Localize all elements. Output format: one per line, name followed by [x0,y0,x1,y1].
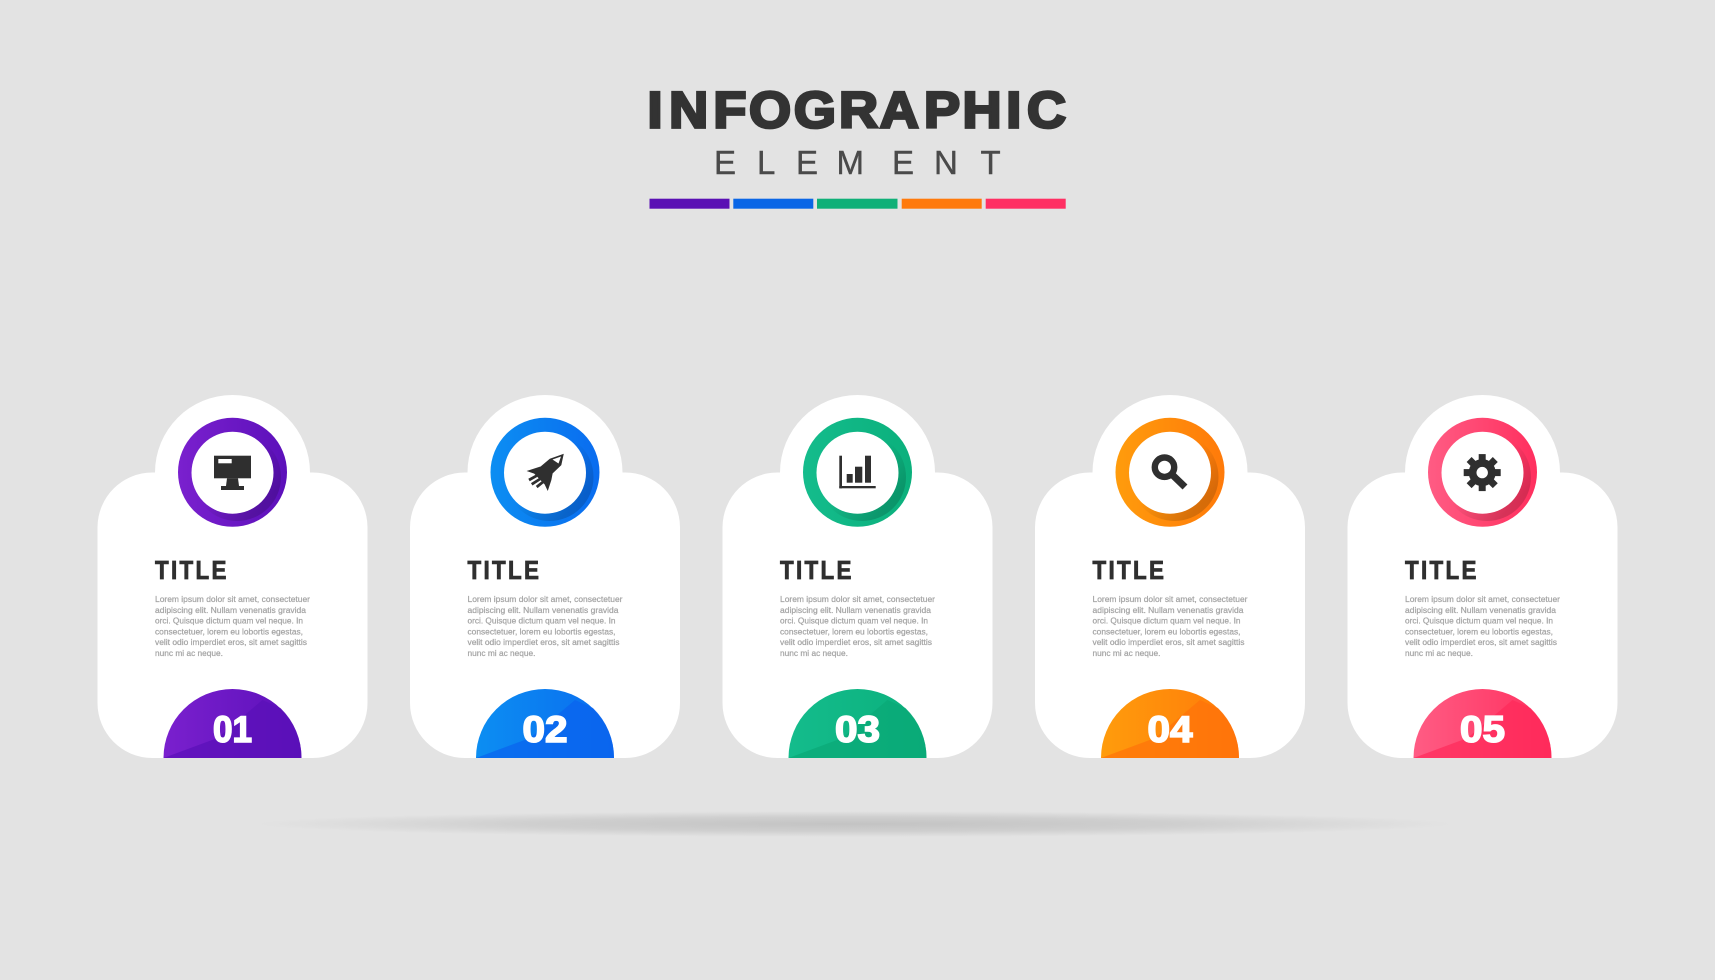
number badge [164,689,302,758]
text block: Lorem ipsum dolor sit amet, consectetuer [468,594,623,604]
text block: orci. Quisque dictum quam vel neque. In [1405,616,1553,626]
text block: Lorem ipsum dolor sit amet, consectetuer [1092,594,1248,604]
icon ring [490,418,600,527]
text block: adipiscing elit. Nullam venenatis gravida [1405,605,1556,615]
panel: step 04 [1035,395,1305,758]
text block [1092,594,1248,658]
icon: rocket [528,454,563,490]
heading: title: TITLE [1405,557,1479,585]
text block: velit odio imperdiet eros, sit amet sagittis [1405,637,1557,647]
text block: Lorem ipsum dolor sit amet, consectetuer [155,594,310,604]
card background [1035,395,1305,758]
icon ring [1116,418,1224,527]
colour legend bars [650,199,1066,209]
text block: Lorem ipsum dolor sit amet, consectetuer [1405,594,1560,604]
text block: consectetuer, lorem eu lobortis egestas, [468,626,616,636]
text block: adipiscing elit. Nullam venenatis gravida [155,605,306,615]
card background [1348,395,1618,758]
text block: orci. Quisque dictum quam vel neque. In [468,616,616,626]
panel: step 01 [98,395,368,758]
number badge [1414,689,1552,758]
text block: nunc mi ac neque. [780,648,848,658]
text block: adipiscing elit. Nullam venenatis gravida [1092,605,1244,615]
text block: Lorem ipsum dolor sit amet, consectetuer [780,594,935,604]
card background [722,395,992,758]
text block: consectetuer, lorem eu lobortis egestas, [1092,626,1240,636]
number badge [1101,689,1239,758]
text block [780,594,935,658]
card background [98,395,368,758]
text block: consectetuer, lorem eu lobortis egestas, [1405,626,1553,636]
icon ring [803,418,912,527]
text block: orci. Quisque dictum quam vel neque. In [780,616,928,626]
number badge: 01 [213,709,252,750]
text block: nunc mi ac neque. [1405,648,1473,658]
text block: orci. Quisque dictum quam vel neque. In [1092,616,1241,626]
ground shadow [257,811,1453,837]
text block: nunc mi ac neque. [1092,648,1160,658]
text block: velit odio imperdiet eros, sit amet sagittis [155,637,307,647]
icon: monitor [214,456,251,490]
number badge: 05 [1460,709,1505,750]
icon ring [1428,418,1537,527]
number badge [476,689,614,758]
icon: bar chart [839,456,876,488]
text block: velit odio imperdiet eros, sit amet sagittis [1092,637,1244,647]
icon: magnifier [1155,458,1185,487]
heading: INFOGRAPHIC: INFOGRAPHIC [647,82,1066,139]
heading: title: TITLE [155,557,229,585]
number badge: 04 [1148,709,1193,750]
text block [1405,594,1560,658]
title [647,82,1066,209]
heading: title: TITLE [468,557,541,585]
subheading: ELEMENT: ELEMENT [714,144,1001,181]
number badge: 02 [522,709,568,750]
panel: step 02 [410,395,680,758]
text block: orci. Quisque dictum quam vel neque. In [155,616,303,626]
text block: consectetuer, lorem eu lobortis egestas, [155,626,303,636]
text block: velit odio imperdiet eros, sit amet sagittis [468,637,620,647]
heading: title: TITLE [780,557,854,585]
panel: step 03 [722,395,992,758]
number badge [788,689,927,758]
number badge: 03 [835,709,880,750]
icon ring [178,418,287,527]
text block: nunc mi ac neque. [468,648,536,658]
text block: consectetuer, lorem eu lobortis egestas, [780,626,928,636]
text block: velit odio imperdiet eros, sit amet sagittis [780,637,932,647]
text block [468,594,623,658]
text block: adipiscing elit. Nullam venenatis gravida [468,605,619,615]
icon: gear [1464,454,1501,491]
panel: step 05 [1348,395,1618,758]
text block: nunc mi ac neque. [155,648,223,658]
text block [155,594,310,658]
heading: title: TITLE [1092,557,1166,585]
card background [410,395,680,758]
text block: adipiscing elit. Nullam venenatis gravida [780,605,931,615]
